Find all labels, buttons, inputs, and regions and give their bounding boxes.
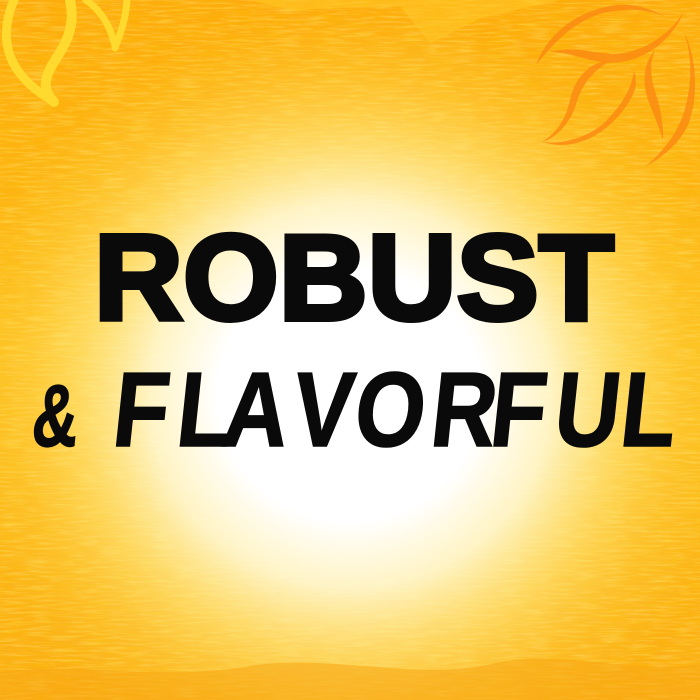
icon: orange leaf outlines, top right xyxy=(536,5,695,167)
subheading: & FLAVORFUL brush lettering: FLAVORFUL xyxy=(108,350,683,469)
icon: yellow leaf outlines, top left xyxy=(6,0,127,102)
subheading: & FLAVORFUL brush lettering: & xyxy=(29,367,83,465)
heading: ROBUST: ROBUST xyxy=(94,210,614,346)
